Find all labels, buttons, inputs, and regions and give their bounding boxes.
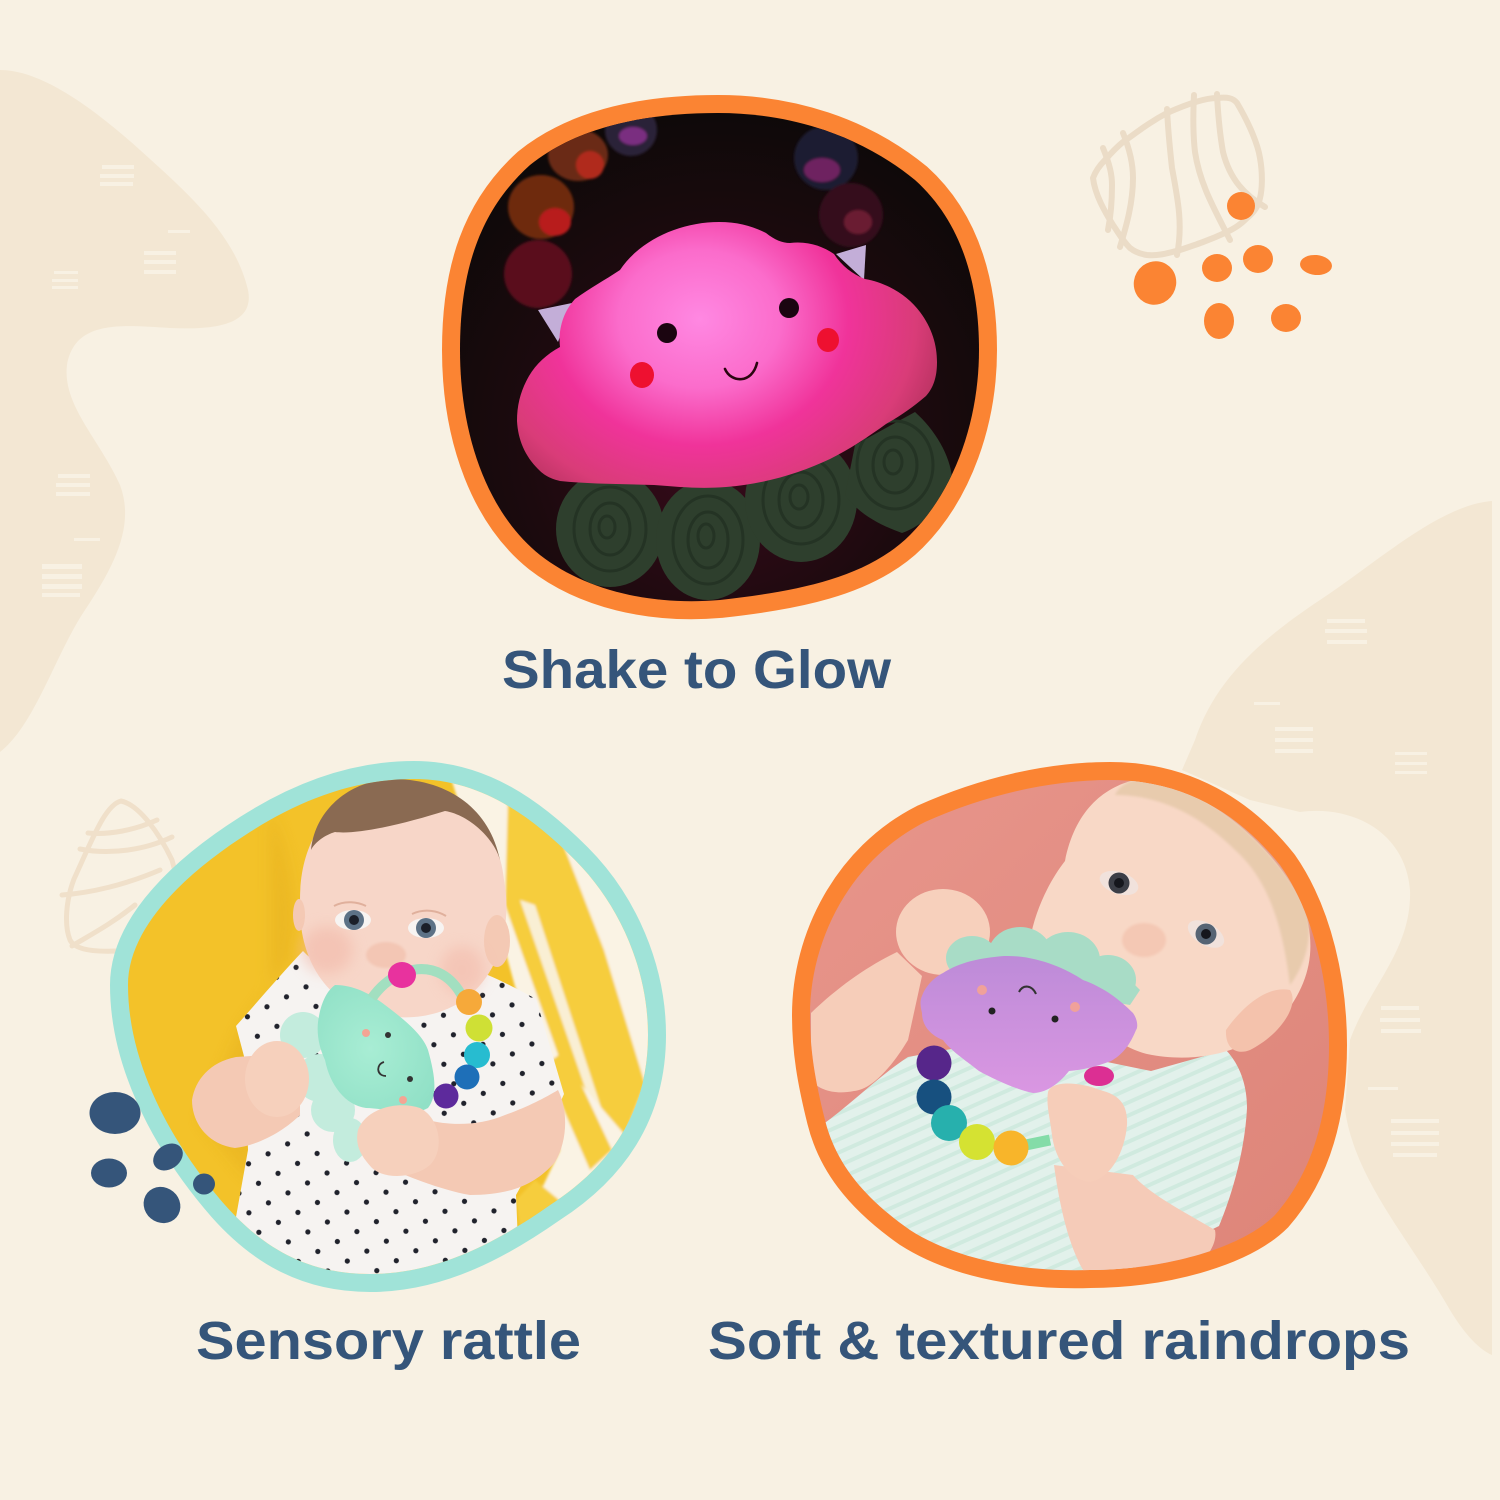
icon: orange dots [1126, 192, 1333, 339]
baby arms [192, 1055, 565, 1195]
green raindrop textured teether [556, 412, 952, 600]
baby arm right [1054, 1165, 1215, 1275]
icon: navy dots [90, 1092, 215, 1231]
purple cloud [920, 956, 1137, 1093]
baby hand top [896, 889, 990, 975]
panel: shake to glow photo [440, 90, 1000, 620]
baby body mint shirt [826, 1049, 1247, 1270]
caption: sensory rattle: Sensory rattle [196, 1311, 581, 1371]
baby body with dotted onesie [236, 951, 564, 1290]
striped blanket [450, 775, 660, 1235]
white bracket accents [538, 245, 866, 342]
heading: shake to glow: Shake to Glow [502, 640, 892, 700]
icon: sketched shell bottom left [62, 801, 180, 951]
baby arm left [811, 952, 922, 1092]
rattle ring and beads [916, 1046, 1050, 1166]
rattle: ring and beads [372, 962, 492, 1108]
icon: sketched shell top right [1093, 94, 1265, 255]
baby head [1030, 779, 1310, 1058]
panel: sensory rattle photo [110, 760, 670, 1290]
raindrop teether mint [946, 927, 1140, 1005]
decorative blob: left [0, 70, 249, 752]
rattle: teether lobes [280, 1012, 367, 1162]
baby hand bottom [1047, 1066, 1127, 1182]
baby head [293, 779, 510, 1017]
panel: soft and textured raindrops photo [790, 760, 1350, 1290]
rattle: mint cloud [318, 985, 434, 1112]
caption: soft and textured raindrops: Soft & textured raindrops [708, 1311, 1410, 1371]
decorative blob: right [1182, 501, 1492, 1355]
beads on ring [504, 104, 883, 308]
baby hands [245, 1041, 439, 1176]
cloud face [657, 323, 677, 343]
glowing pink cloud [517, 222, 937, 488]
